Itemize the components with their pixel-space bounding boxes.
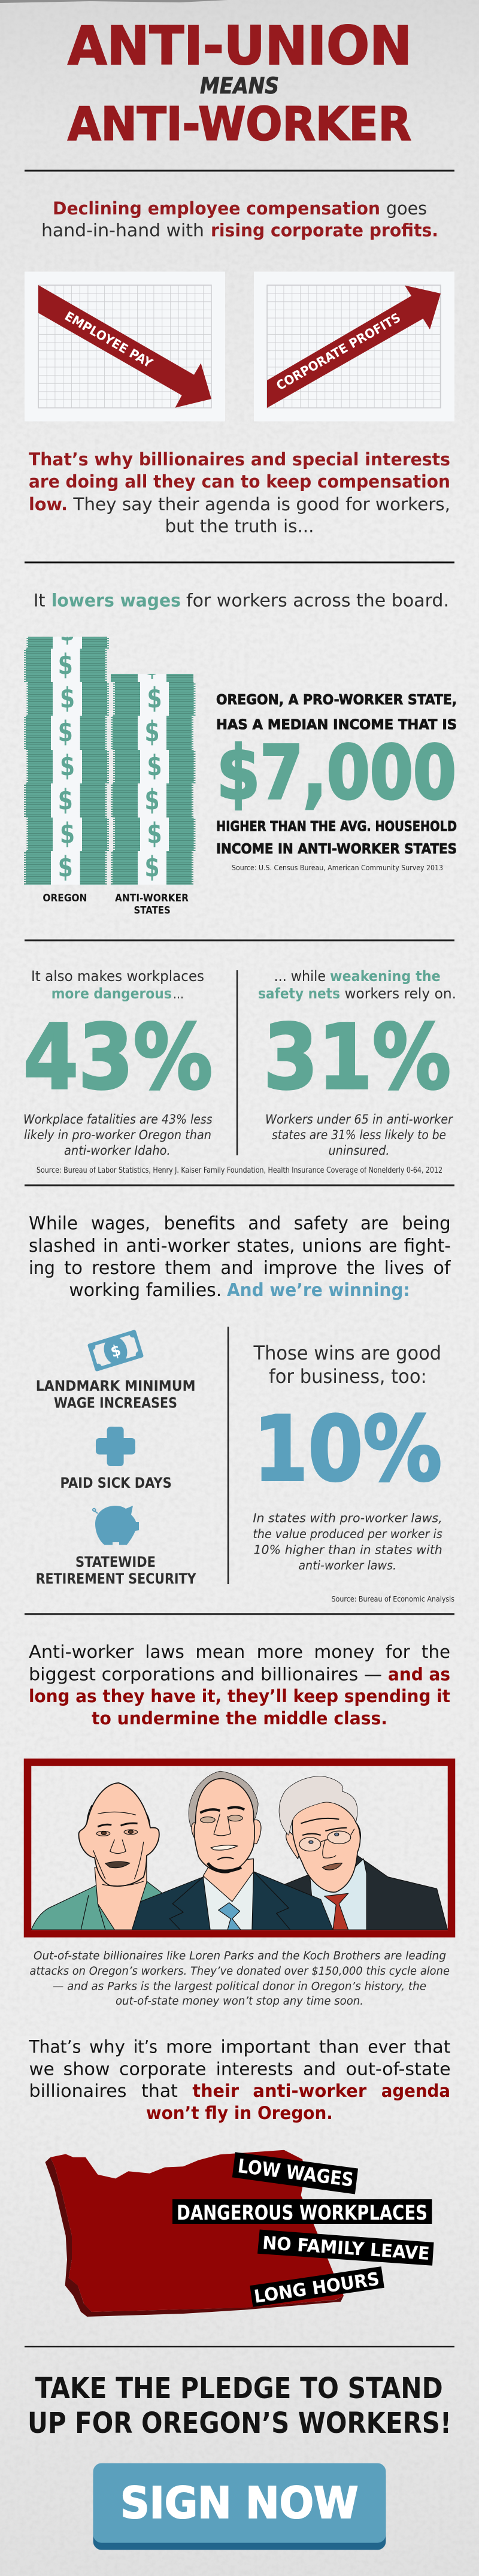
money stack: Oregon: $ (58, 716, 73, 749)
lowers wages heading (34, 591, 449, 611)
unions paragraph: ing (29, 1258, 55, 1279)
agenda paragraph: their (192, 2081, 239, 2101)
illustration caption: attacks on Oregon’s workers. They’ve donated over $150,000 this cycle alone (30, 1965, 450, 1978)
agenda paragraph: interests (216, 2059, 293, 2079)
money stack: anti-worker states: $ (147, 682, 162, 715)
agenda paragraph: than (319, 2037, 359, 2057)
illustration caption (30, 1950, 450, 2008)
stack labels: STATES (134, 905, 171, 916)
sign now button (93, 2463, 386, 2550)
win: minimum wage label: WAGE INCREASES (54, 1394, 177, 1411)
billionaires paragraph: but the truth is... (165, 516, 314, 537)
panel: weakening safety nets: states are 31% less likely to be (272, 1128, 446, 1143)
panel: weakening safety nets: workers rely on. (345, 985, 456, 1002)
label: no family leave: NO FAMILY LEAVE (262, 2233, 430, 2265)
billionaires paragraph: low. (29, 494, 68, 514)
win: retirement security label (36, 1554, 196, 1587)
panel: good for business: for business, too: (269, 1365, 427, 1388)
lowers wages heading: lowers wages (51, 591, 181, 611)
panel: good for business: the value produced per worker is (253, 1527, 442, 1541)
agenda paragraph: won’t fly in Oregon. (146, 2103, 333, 2123)
agenda paragraph: that (141, 2081, 178, 2101)
panel: good for business: anti-worker laws. (298, 1558, 396, 1573)
agenda paragraph (29, 2037, 451, 2123)
billionaires paragraph: That’s why billionaires and special interests (29, 449, 450, 470)
middle class paragraph: for (386, 1642, 411, 1662)
title: MEANS (200, 73, 279, 99)
label: dangerous workplaces: DANGEROUS WORKPLACES (177, 2201, 428, 2225)
intro text: Declining employee compensation (53, 198, 380, 219)
income callout: INCOME IN ANTI-WORKER STATES (216, 841, 457, 857)
agenda paragraph: That’s (29, 2037, 81, 2057)
money stack: Oregon: $ (58, 784, 73, 817)
illustration: billionaires portrait (28, 1762, 451, 1933)
unions paragraph: unions (302, 1236, 362, 1257)
middle class paragraph: Anti-worker (29, 1642, 134, 1662)
money stack: Oregon (24, 615, 109, 885)
income callout: Source: U.S. Census Bureau, American Community Survey 2013 (232, 863, 443, 872)
stack labels: ANTI-WORKER (115, 892, 189, 904)
icon: piggy bank (93, 1506, 139, 1545)
illustration caption: out-of-state money won’t stop any time soon. (116, 1995, 363, 2008)
panel: weakening safety nets: uninsured. (328, 1143, 389, 1158)
panel: good for business: 10% higher than in states with (254, 1543, 442, 1557)
money stack: anti-worker states: $ (145, 716, 159, 749)
middle class paragraph: to undermine the middle class. (92, 1708, 387, 1729)
title (68, 15, 412, 151)
unions paragraph: anti-worker (126, 1236, 230, 1257)
agenda paragraph: billionaires (29, 2081, 127, 2101)
agenda paragraph: why (89, 2037, 125, 2057)
money stack: anti-worker states (111, 674, 195, 885)
intro text: goes (386, 198, 427, 219)
middle class paragraph: the (422, 1642, 450, 1662)
unions paragraph: to (64, 1258, 83, 1279)
agenda paragraph: that (414, 2037, 450, 2057)
panel: good for business: Source: Bureau of Economic Analysis (332, 1594, 454, 1603)
panel: good for business: 10% (253, 1398, 442, 1502)
map: Oregon with labels (46, 2150, 433, 2317)
panel: more dangerous: more dangerous (51, 985, 172, 1002)
icon: dollar bill (87, 1330, 144, 1372)
unions paragraph: While (29, 1213, 78, 1234)
agenda paragraph: and (303, 2059, 336, 2079)
intro text: rising corporate profits. (211, 220, 438, 241)
money stack: anti-worker states: $ (145, 649, 159, 682)
agenda paragraph: corporate (119, 2059, 206, 2079)
unions paragraph: them (165, 1258, 211, 1279)
unions paragraph: And we’re winning: (227, 1280, 410, 1301)
unions paragraph: and (220, 1258, 253, 1279)
unions paragraph: working families. (69, 1280, 222, 1301)
income callout (216, 692, 457, 872)
money stack: Oregon: $ (60, 818, 75, 850)
middle class paragraph: more (257, 1642, 303, 1662)
unions paragraph: restore (92, 1258, 156, 1279)
money stack: anti-worker states: $ (147, 750, 162, 783)
money stack: Oregon: $ (58, 851, 73, 884)
panel: weakening safety nets: Workers under 65 in anti-worker (265, 1112, 453, 1127)
unions paragraph: improve (263, 1258, 337, 1279)
money stack: Oregon: $ (58, 649, 73, 682)
intro text: hand-in-hand with (41, 220, 204, 241)
middle class paragraph: long as they have it, they’ll keep spending it (29, 1686, 450, 1706)
lowers wages heading: It (34, 591, 46, 611)
middle class paragraph: and as (388, 1664, 450, 1684)
chart: corporate profits rising (254, 272, 454, 422)
money stack: Oregon: $ (60, 615, 75, 648)
income callout: OREGON, A PRO-WORKER STATE, (216, 692, 457, 708)
win: paid sick days label: PAID SICK DAYS (60, 1475, 172, 1491)
middle class paragraph: laws (145, 1642, 184, 1662)
panel: weakening safety nets: weakening the (330, 968, 441, 985)
unions paragraph: the (347, 1258, 375, 1279)
middle class paragraph: biggest corporations and billionaires — (29, 1664, 382, 1684)
panel: weakening safety nets (258, 968, 456, 1158)
agenda paragraph: ever (368, 2037, 406, 2057)
title: ANTI-WORKER (68, 98, 411, 151)
middle class paragraph: mean (195, 1642, 245, 1662)
agenda paragraph: out-of-state (346, 2059, 451, 2079)
panel: more dangerous: anti-worker Idaho. (64, 1143, 171, 1158)
man three (277, 1855, 447, 1930)
income callout: HAS A MEDIAN INCOME THAT IS (216, 718, 457, 733)
panel: more dangerous: ... (173, 985, 184, 1002)
sign now button: SIGN NOW (120, 2478, 358, 2529)
label: low wages: LOW WAGES (237, 2154, 355, 2191)
middle class paragraph: money (314, 1642, 375, 1662)
unions paragraph: and (248, 1213, 281, 1234)
money stack: Oregon: $ (60, 682, 75, 715)
unions paragraph: in (103, 1236, 119, 1257)
chart: employee pay falling: EMPLOYEE PAY (62, 309, 156, 371)
agenda paragraph: important (220, 2037, 310, 2057)
man one (31, 1881, 163, 1930)
panel: good for business: Those wins are good (253, 1342, 441, 1364)
billionaires paragraph: They say their agenda is good for workers, (72, 494, 450, 514)
panel: more dangerous: likely in pro-worker Oregon than (24, 1128, 211, 1143)
label: long hours: LONG HOURS (253, 2269, 381, 2308)
unions paragraph: lives (384, 1258, 424, 1279)
middle class paragraph (29, 1642, 450, 1729)
panel: weakening safety nets: ... while (274, 968, 326, 985)
panel: weakening safety nets: 31% (263, 1006, 451, 1110)
unions paragraph: being (402, 1213, 451, 1234)
unions paragraph (29, 1213, 451, 1301)
stack labels (43, 892, 189, 916)
chart: employee pay falling (25, 272, 225, 422)
agenda paragraph: agenda (381, 2081, 450, 2101)
title: ANTI-UNION (68, 15, 412, 77)
intro text (41, 198, 438, 241)
money stack: anti-worker states: $ (145, 851, 159, 884)
win: minimum wage label: LANDMARK MINIMUM (36, 1378, 195, 1394)
panel: more dangerous: 43% (23, 1006, 213, 1110)
win: minimum wage label (36, 1378, 195, 1411)
agenda paragraph: we (29, 2059, 54, 2079)
agenda paragraph: more (166, 2037, 212, 2057)
unions paragraph: wages, (91, 1213, 150, 1234)
unions paragraph: slashed (29, 1236, 96, 1257)
panel: good for business (253, 1342, 454, 1603)
win: retirement security label: RETIREMENT SECURITY (36, 1570, 196, 1587)
panel: more dangerous: Workplace fatalities are 43% less (23, 1112, 213, 1127)
money stack: anti-worker states: $ (145, 784, 159, 817)
win: retirement security label: STATEWIDE (75, 1554, 156, 1570)
agenda paragraph: it’s (134, 2037, 157, 2057)
unions paragraph: are (369, 1236, 397, 1257)
panel: weakening safety nets: safety nets (258, 985, 340, 1002)
unions paragraph: safety (294, 1213, 348, 1234)
billionaires paragraph (29, 449, 450, 537)
unions paragraph: of (433, 1258, 451, 1279)
panel: good for business: In states with pro-worker laws, (253, 1511, 442, 1525)
illustration caption: Out-of-state billionaires like Loren Parks and the Koch Brothers are leading (34, 1950, 446, 1962)
money stack: Oregon: $ (60, 750, 75, 783)
lowers wages heading: for workers across the board. (186, 591, 449, 611)
agenda paragraph: show (63, 2059, 110, 2079)
illustration caption: — and as Parks is the largest political donor in Oregon’s history, the (53, 1980, 426, 1993)
unions paragraph: are (360, 1213, 389, 1234)
stack labels: OREGON (43, 892, 87, 904)
panel: more dangerous (23, 968, 213, 1158)
man two (132, 1872, 333, 1930)
money stack: anti-worker states: $ (147, 818, 162, 850)
billionaires paragraph: are doing all they can to keep compensation (29, 471, 450, 492)
chart: corporate profits rising: CORPORATE PROFITS (274, 310, 403, 393)
agenda paragraph: anti-worker (253, 2081, 367, 2101)
panel: more dangerous: It also makes workplaces (31, 968, 204, 985)
unions paragraph: benefits (164, 1213, 235, 1234)
icon: dollar bill: $ (108, 1342, 123, 1361)
unions paragraph: states, (237, 1236, 295, 1257)
unions paragraph: fight- (404, 1236, 451, 1257)
icon: medical cross (96, 1427, 135, 1466)
call to action heading (28, 2372, 451, 2440)
